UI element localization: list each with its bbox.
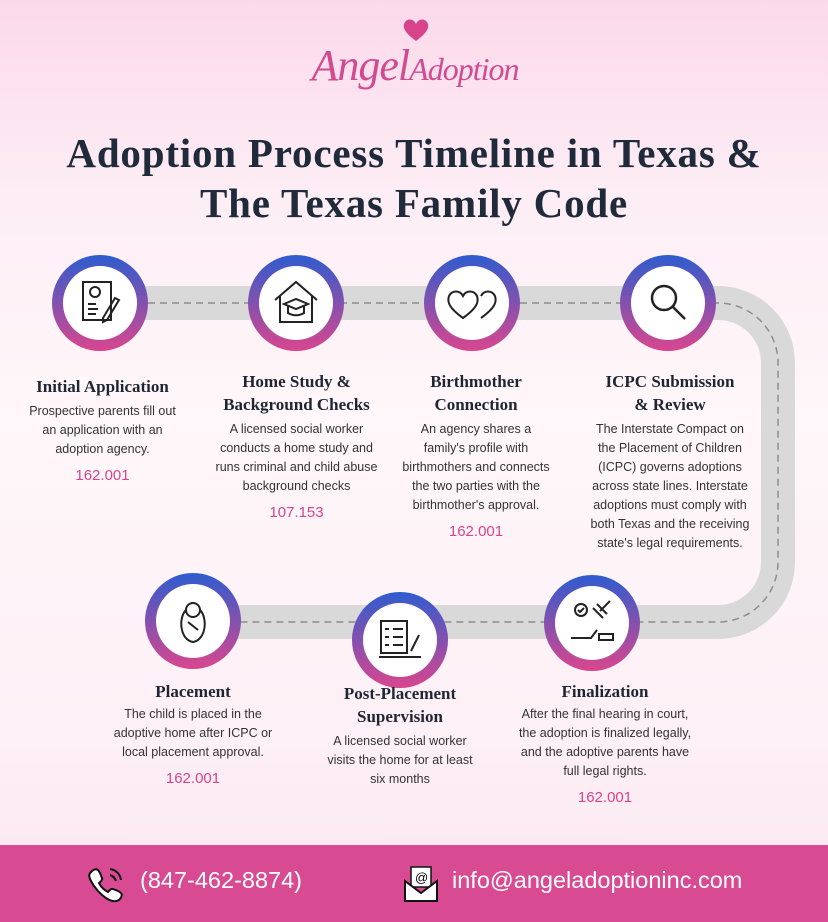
icon: envelope: [404, 866, 438, 902]
title: [66, 130, 762, 226]
footer: [0, 845, 828, 922]
step 5 text: The child is placed in the adoptive home after ICPC or local placement approval.: [114, 707, 272, 759]
step 1 text: [29, 377, 176, 484]
step 4 text: & Review: [634, 395, 706, 414]
step 6 text: [327, 684, 473, 786]
step 4 icon: magnifier: [620, 255, 716, 351]
step 6 icon: checklist: [352, 592, 448, 688]
step 5 text: [114, 682, 272, 787]
step 7 icon: gavel: [544, 575, 640, 671]
step 1 icon: application: [52, 255, 148, 351]
icon: envelope: @: [415, 870, 428, 885]
step 1 text: Initial Application: [36, 377, 169, 396]
icon: phone: [88, 868, 123, 902]
step 6 text: A licensed social worker visits the home for at least six months: [327, 734, 473, 786]
logo: AngelAdoption: [312, 41, 518, 90]
step 3 text: 162.001: [449, 523, 503, 540]
step 3 text: An agency shares a family's profile with birthmothers and connects the two parties with the birthmother's approval.: [402, 422, 550, 512]
phone number: (847-462-8874): [140, 867, 302, 893]
step 2 text: 107.153: [269, 504, 324, 521]
step 2 text: Home Study &: [242, 372, 351, 391]
step 7 text: After the final hearing in court, the adoption is finalized legally, and the adoptive parents have full legal rights.: [519, 707, 691, 778]
step 5 text: Placement: [155, 682, 231, 701]
step 2 text: Background Checks: [223, 395, 370, 414]
step 3 text: Birthmother: [430, 372, 522, 391]
step 2 text: [216, 372, 377, 521]
step 2 icon: house: [248, 255, 344, 351]
step 3 text: Connection: [434, 395, 518, 414]
step 1 text: Prospective parents fill out an application with an adoption agency.: [29, 404, 176, 456]
step 4 text: ICPC Submission: [606, 372, 734, 391]
step 3 text: [402, 372, 550, 540]
icon: heart: [404, 20, 428, 41]
step 3 icon: hearts: [424, 255, 520, 351]
step 7 text: [519, 682, 691, 806]
title: The Texas Family Code: [200, 180, 628, 226]
step 6 text: Post-Placement: [344, 684, 456, 703]
step 5 icon: baby: [145, 573, 241, 669]
step 1 text: 162.001: [75, 467, 130, 484]
step 5 text: 162.001: [166, 770, 220, 787]
title: Adoption Process Timeline in Texas &: [66, 130, 762, 176]
step 7 text: 162.001: [578, 789, 632, 806]
step 4 text: The Interstate Compact on the Placement of Children (ICPC) governs adoptions across state lines. Interstate adoptions must comply with both Texas and the receiving state's legal requirements.: [591, 422, 749, 550]
logo: [309, 20, 518, 90]
email: info@angeladoptioninc.com: [452, 867, 742, 893]
step 6 text: Supervision: [357, 707, 443, 726]
step 7 text: Finalization: [562, 682, 648, 701]
step 2 text: A licensed social worker conducts a home study and runs criminal and child abuse background checks: [216, 422, 377, 493]
